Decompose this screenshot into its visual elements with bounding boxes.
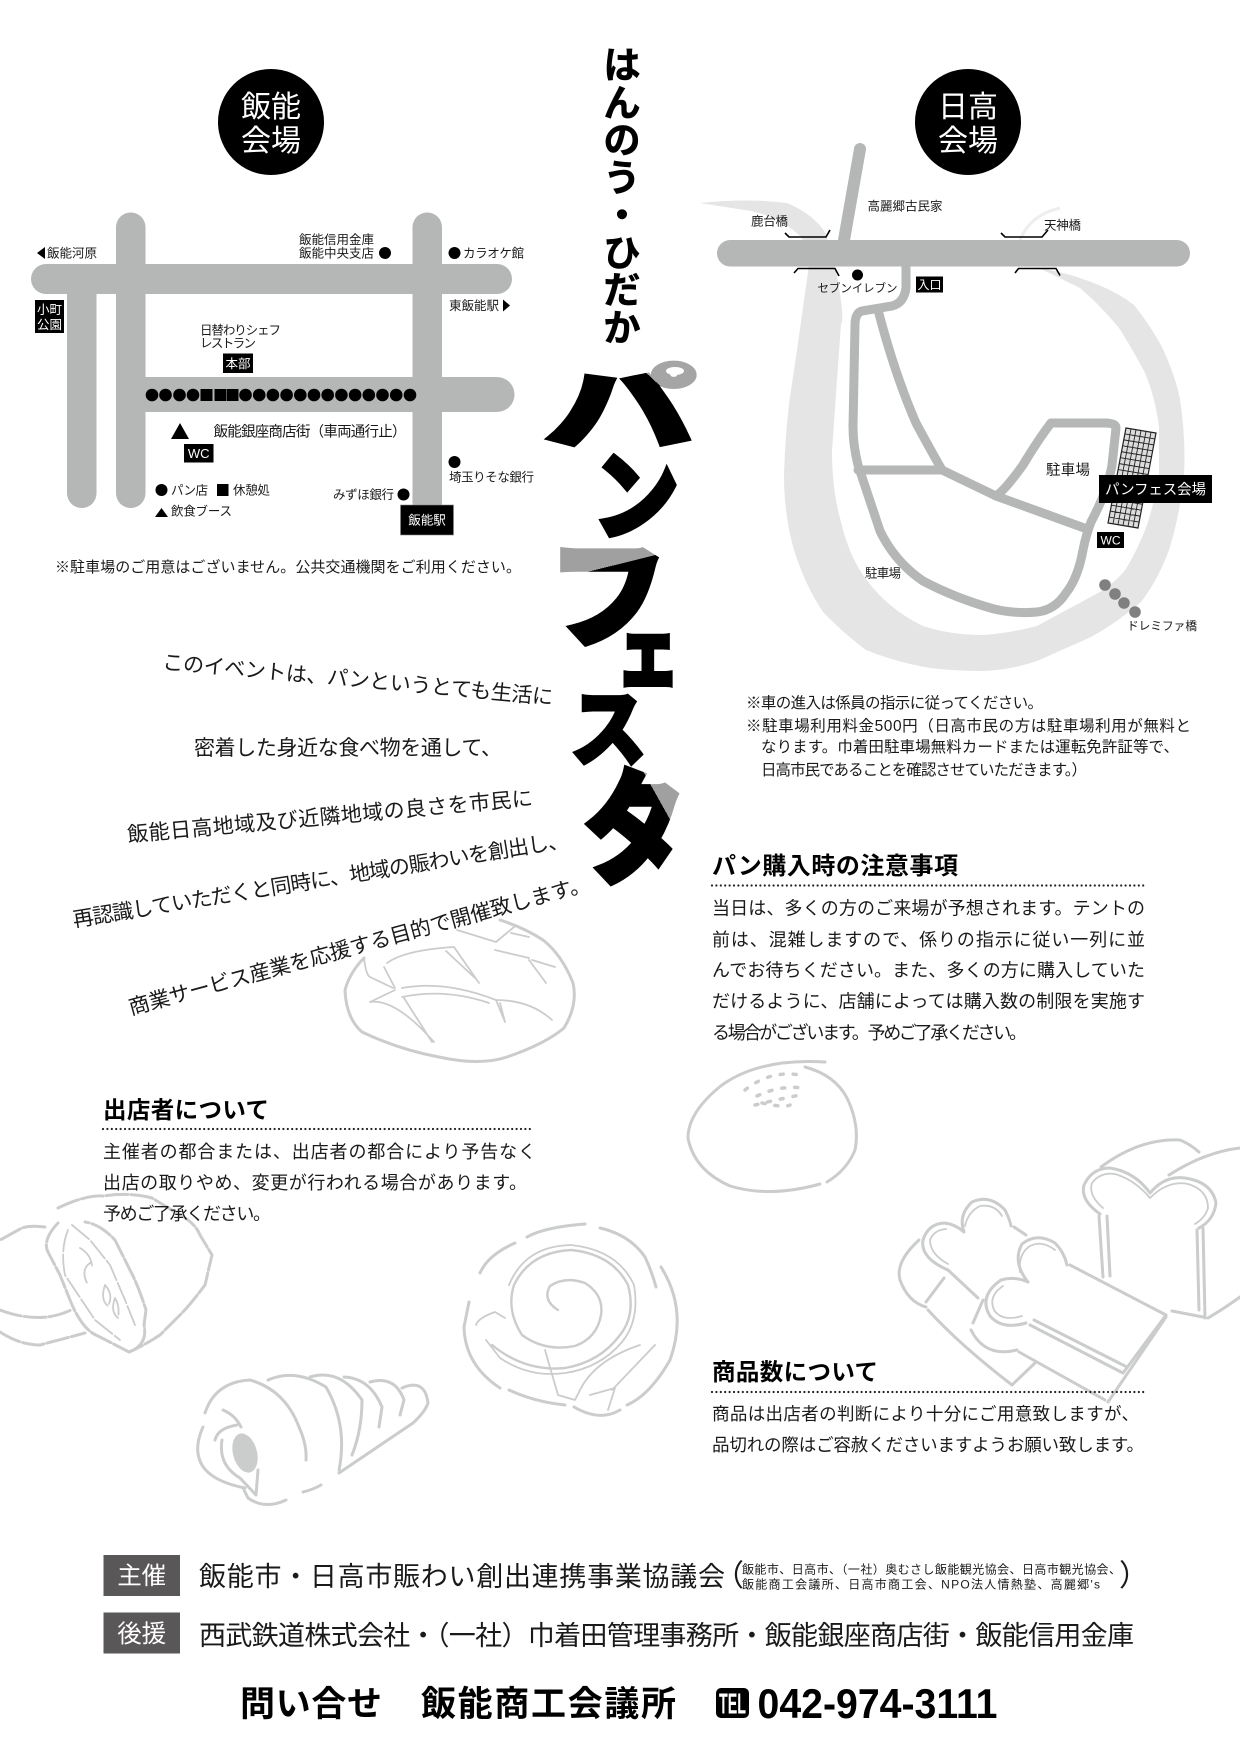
notes: 日高会場: 日高市民であることを確認させていただきます。） bbox=[761, 761, 1087, 779]
illustration: melon bread bbox=[345, 920, 574, 1062]
river bbox=[700, 200, 1184, 671]
section: パン購入時の注意事項: パン購入時の注意事項 bbox=[712, 853, 958, 880]
footer: 主催: （ bbox=[714, 1560, 744, 1593]
legend: パン店 bbox=[171, 484, 208, 498]
badge: 日高会場: 会場 bbox=[938, 125, 998, 158]
section: パン購入時の注意事項: 当日は、多くの方のご来場が予想されます。テントの bbox=[712, 898, 1145, 918]
notes: 日高会場: ※駐車場利用料金500円（日高市民の方は駐車場利用が無料と bbox=[746, 717, 1191, 735]
illustration: cream horn bbox=[198, 1375, 428, 1505]
map: 日高会場 bbox=[700, 149, 1212, 671]
footer: 主催: 飯能商工会議所、日高市商工会、NPO法人情熱塾、高麗郷's bbox=[742, 1578, 1100, 1592]
intro text bbox=[71, 651, 593, 1020]
section: 出店者について bbox=[103, 1097, 536, 1224]
label box: パンフェス会場 bbox=[1099, 475, 1212, 503]
badge: 日高会場 bbox=[915, 69, 1021, 175]
footer: 後援: 後援 bbox=[117, 1620, 166, 1648]
shop markers row bbox=[146, 389, 416, 401]
map: 飯能会場: 飯能銀座商店街（車両通行止） bbox=[214, 424, 406, 440]
intro text: 商業サービス産業を応援する目的で開催致します。 bbox=[126, 873, 593, 1020]
title: パンフェスタ: パ bbox=[547, 358, 695, 461]
map: 日高会場: 鹿台橋 bbox=[751, 214, 788, 228]
icon: TEL: TEL bbox=[719, 1688, 746, 1720]
title: パンフェスタ bbox=[547, 358, 695, 899]
badge: 飯能会場: 会場 bbox=[241, 125, 301, 158]
notes: 日高会場 bbox=[746, 694, 1191, 779]
illustration: croquette bbox=[0, 1194, 212, 1352]
map: 飯能会場: レストラン bbox=[200, 336, 256, 350]
label box: WC bbox=[1097, 532, 1124, 548]
notes: 日高会場: なります。巾着田駐車場無料カードまたは運転免許証等で、 bbox=[761, 738, 1179, 756]
label box: 本部: 本部 bbox=[225, 357, 251, 371]
intro text: 密着した身近な食べ物を通して、 bbox=[194, 737, 502, 760]
footer: contact bbox=[240, 1680, 998, 1727]
note: 飯能会場 parking: ※駐車場のご用意はございません。公共交通機関をご利用ください。 bbox=[55, 558, 521, 576]
illustration: spiral bun bbox=[464, 1224, 677, 1415]
badge: 日高会場: 日高 bbox=[938, 91, 998, 124]
label box: 入口: 入口 bbox=[917, 278, 942, 292]
illustration: sesame bun bbox=[688, 1061, 856, 1192]
title: パンフェスタ: ン bbox=[594, 444, 678, 552]
map: 日高会場: セブンイレブン bbox=[818, 281, 898, 295]
label box: 小町公園 bbox=[35, 300, 64, 333]
map: 飯能会場: カラオケ館 bbox=[463, 246, 524, 260]
title: パンフェスタ: ス bbox=[571, 683, 646, 776]
section: 出店者について: 出店者について bbox=[103, 1097, 269, 1123]
badge: 飯能会場 bbox=[218, 69, 324, 175]
map: 飯能会場: 飯能河原 bbox=[47, 246, 97, 260]
legend: 飲食ブース bbox=[171, 504, 232, 518]
section: 出店者について: 主催者の都合または、出店者の都合により予告なく bbox=[103, 1142, 536, 1162]
map: 飯能会場: 飯能中央支店 bbox=[299, 246, 374, 260]
section: パン購入時の注意事項 bbox=[712, 853, 1145, 1043]
section: パン購入時の注意事項: る場合がございます。予めご了承ください。 bbox=[712, 1022, 1027, 1043]
footer: contact: 問い合せ bbox=[240, 1685, 382, 1724]
footer: contact: 042-974-3111 bbox=[758, 1680, 998, 1727]
title: パンフェスタ: ェ bbox=[616, 606, 680, 700]
section: 商品数について: 商品は出店者の判断により十分にご用意致しますが、 bbox=[712, 1404, 1139, 1424]
intro text: このイベントは、パンというとても生活に bbox=[162, 651, 554, 710]
section: パン購入時の注意事項: んでお待ちください。また、多くの方に購入していた bbox=[712, 960, 1145, 980]
title: パンフェスタ: タ bbox=[584, 762, 685, 899]
bridges bbox=[785, 230, 1060, 276]
section: 商品数について bbox=[712, 1359, 1144, 1455]
label box: 本部 bbox=[223, 354, 253, 373]
label box: 飯能駅: 飯能駅 bbox=[408, 512, 446, 528]
footer: 主催: 飯能市・日高市賑わい創出連携事業協議会 bbox=[199, 1562, 725, 1592]
label box: WC: WC bbox=[188, 446, 210, 461]
map: 日高会場: 駐車場 bbox=[1046, 462, 1090, 479]
venue grid bbox=[1108, 428, 1156, 528]
footer: 主催: 主催 bbox=[117, 1562, 166, 1590]
label box: 小町公園: 小町 bbox=[37, 303, 62, 317]
ドレミファ橋 bbox=[1099, 579, 1197, 633]
footer: 主催 bbox=[104, 1555, 1149, 1596]
footer: 後援 bbox=[104, 1612, 1134, 1654]
label box: WC: WC bbox=[1100, 534, 1121, 548]
legend bbox=[155, 482, 270, 518]
label box: パンフェス会場: パンフェス会場 bbox=[1105, 482, 1206, 498]
label box: 飯能駅 bbox=[400, 505, 454, 535]
map: 飯能会場: 埼玉りそな銀行 bbox=[449, 470, 534, 484]
map: 日高会場: 高麗郷古民家 bbox=[868, 198, 942, 214]
map: 日高会場: 天神橋 bbox=[1044, 218, 1081, 232]
title: パンフェスタ: フ bbox=[549, 531, 667, 662]
intro text: 飯能日高地域及び近隣地域の良さを市民に bbox=[126, 787, 534, 847]
footer: 主催: 飯能市、日高市、（一社）奥むさし飯能観光協会、日高市観光協会、 bbox=[742, 1562, 1121, 1576]
section: 出店者について: 予めご了承ください。 bbox=[103, 1204, 271, 1224]
section: パン購入時の注意事項: だけるように、店舗によっては購入数の制限を実施す bbox=[712, 992, 1145, 1012]
legend: 休憩処 bbox=[233, 482, 270, 498]
title: はんのう・ひだか: はんのう・ひだか bbox=[604, 45, 640, 349]
section: 出店者について: 出店の取りやめ、変更が行われる場合があります。 bbox=[103, 1173, 527, 1193]
section: パン購入時の注意事項: 前は、混雑しますので、係りの指示に従い一列に並 bbox=[712, 930, 1145, 950]
intro text: 再認識していただくと同時に、地域の賑わいを創出し、 bbox=[71, 829, 570, 932]
ドレミファ橋: ドレミファ橋 bbox=[1127, 619, 1197, 633]
section: 商品数について: 品切れの際はご容赦くださいますようお願い致します。 bbox=[712, 1435, 1144, 1455]
footer: 後援: 西武鉄道株式会社・（一社）巾着田管理事務所・飯能銀座商店街・飯能信用金庫 bbox=[199, 1621, 1134, 1651]
map: 飯能会場: 東飯能駅 bbox=[449, 298, 499, 313]
label box: WC bbox=[184, 444, 214, 462]
map: 日高会場: 駐車場 bbox=[865, 566, 901, 580]
map: 飯能会場: 飯能信用金庫 bbox=[299, 232, 374, 247]
map: 飯能会場: みずほ銀行 bbox=[333, 488, 394, 502]
map: 飯能会場: 日替わりシェフ bbox=[200, 324, 281, 338]
badge: 飯能会場: 飯能 bbox=[241, 91, 301, 124]
section: 商品数について: 商品数について bbox=[712, 1359, 878, 1385]
icon: TEL bbox=[716, 1688, 749, 1720]
footer: contact: 飯能商工会議所 bbox=[421, 1685, 676, 1724]
label box: 小町公園: 公園 bbox=[37, 318, 62, 332]
main road bbox=[717, 240, 1190, 266]
footer: 主催: ） bbox=[1119, 1560, 1149, 1593]
illustration: bread loaves bbox=[899, 1140, 1240, 1402]
notes: 日高会場: ※車の進入は係員の指示に従ってください。 bbox=[746, 694, 1043, 712]
map: 飯能会場 bbox=[31, 212, 534, 535]
